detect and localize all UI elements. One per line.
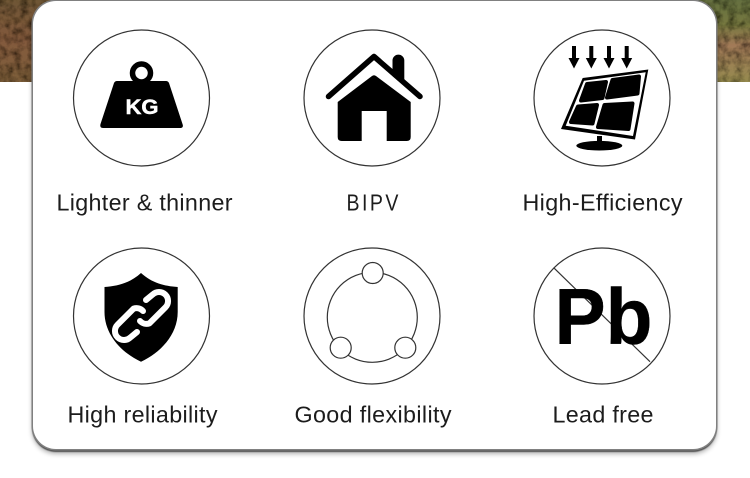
icon: crossed-out Pb: Pb <box>554 272 652 360</box>
icon: house <box>328 55 420 141</box>
feature: BIPV <box>304 30 440 216</box>
label: Lighter & thinner: Lighter & thinner <box>56 190 233 216</box>
icon: shield with chain link <box>104 273 178 362</box>
label: Lead free: Lead free <box>552 402 654 428</box>
feature: lighter and thinner <box>56 30 233 216</box>
icon: kg weight <box>100 64 183 128</box>
label: Good flexibility: Good flexibility <box>294 402 452 428</box>
feature: lead free <box>534 248 670 428</box>
icon: solar panel <box>561 70 648 150</box>
label: BIPV: BIPV <box>346 190 401 216</box>
icon: sunlight arrows <box>568 46 632 68</box>
icon: kg weight: KG <box>126 96 158 119</box>
feature: high reliability <box>68 248 218 428</box>
label: High reliability: High reliability <box>68 402 218 428</box>
feature: good flexibility <box>294 248 452 428</box>
label: High-Efficiency: High-Efficiency <box>522 190 683 216</box>
feature: high efficiency <box>522 30 683 216</box>
background photo strip <box>0 0 750 82</box>
icon: ring with three nodes <box>327 262 417 362</box>
